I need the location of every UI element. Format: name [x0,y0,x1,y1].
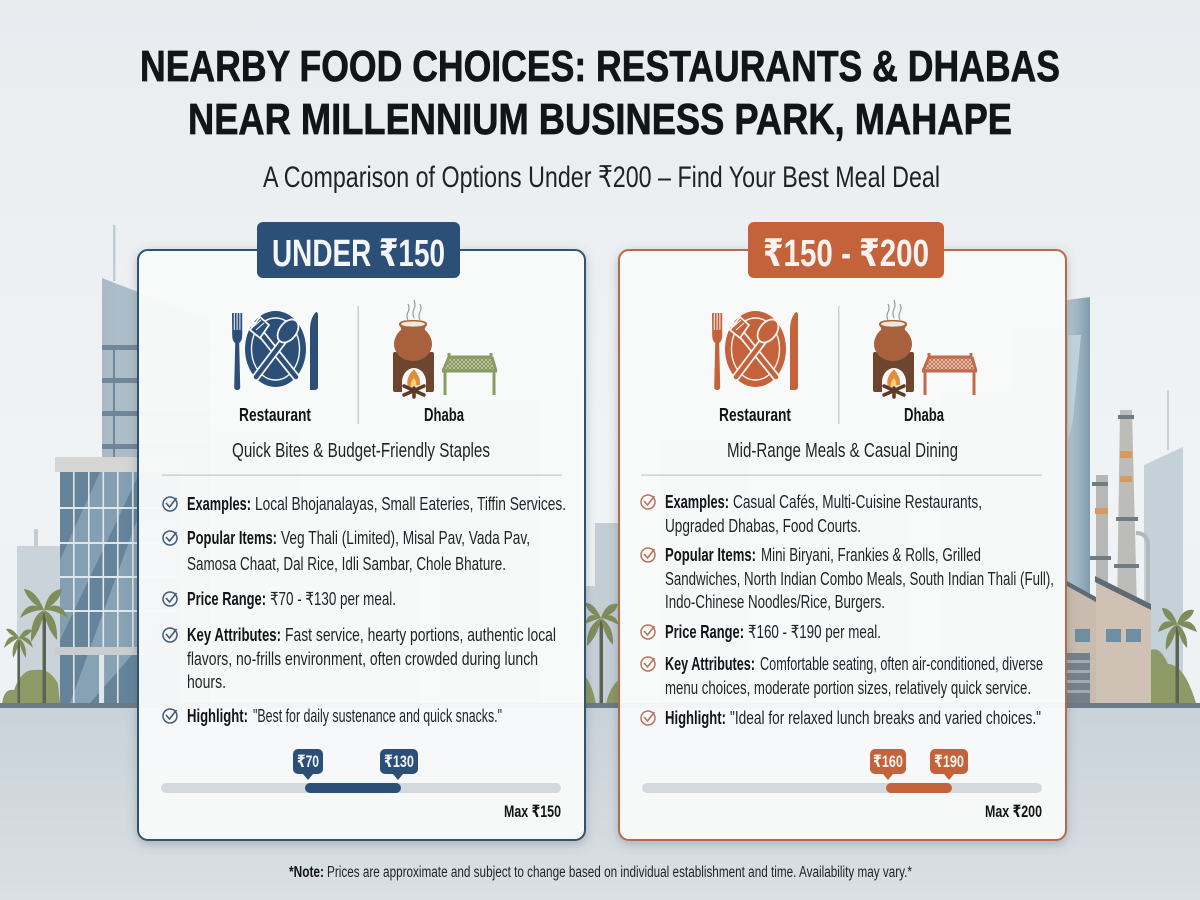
item: examples [163,494,566,514]
divider [358,306,359,424]
item: popular items [641,545,1054,612]
badge: 150 to 200: ₹150 - ₹200 [763,233,929,275]
max label: Max ₹150 [504,802,561,821]
price range bar [642,749,1042,821]
icon: restaurant plate and cutlery [712,311,798,390]
item: highlight: Highlight: [187,706,248,726]
panel: under 150 [138,222,585,840]
badge: under 150: UNDER ₹150 [272,233,445,275]
tagline: Mid-Range Meals & Casual Dining [727,440,958,462]
label: dhaba: Dhaba [424,405,465,425]
tagline: Quick Bites & Budget-Friendly Staples [232,440,490,462]
item: key attributes [163,625,556,692]
tooltip: 130: ₹130 [384,752,414,771]
item: highlight: "Ideal for relaxed lunch breaks and varied choices." [730,708,1041,728]
background: left city buildings [2,225,210,704]
ground line [0,703,1200,708]
item: key attributes: hours. [187,672,226,692]
item: popular items [163,528,530,574]
item: price range: ₹70 - ₹130 per meal. [270,589,396,609]
item: popular items: Indo-Chinese Noodles/Rice, Burgers. [665,592,885,612]
badge: under 150 [257,222,460,278]
item: key attributes [641,654,1043,698]
divider [838,306,839,424]
icon: dhaba clay pot on stove with cot [393,300,497,397]
tooltip: 130 [380,749,418,780]
tooltip: 70: ₹70 [297,752,319,771]
item: price range [641,622,881,642]
item: examples: Examples: [665,492,729,512]
footnote: Prices are approximate and subject to change based on individual establishment and time. Availability may vary.* [327,864,912,881]
item: examples: Local Bhojanalayas, Small Eateries, Tiffin Services. [255,494,566,514]
item: popular items: Mini Biryani, Frankies & Rolls, Grilled [761,545,981,565]
item: examples: Upgraded Dhabas, Food Courts. [665,516,861,536]
icon: dhaba clay pot on stove with cot [873,300,977,397]
item: highlight: "Best for daily sustenance and quick snacks." [253,706,502,726]
item: key attributes: Key Attributes: [665,654,755,674]
item: key attributes: Comfortable seating, often air-conditioned, diverse [760,654,1043,674]
tooltip: 70 [293,749,323,780]
item: examples: Examples: [187,494,251,514]
item: key attributes: Key Attributes: [187,625,281,645]
item: price range: Price Range: [665,622,744,642]
title: NEAR MILLENNIUM BUSINESS PARK, MAHAPE [188,95,1012,144]
card background [138,250,585,840]
title [140,42,1060,144]
label: dhaba: Dhaba [904,405,945,425]
item: key attributes: Fast service, hearty portions, authentic local [285,625,556,645]
item: highlight [163,706,502,726]
item: price range: Price Range: [187,589,266,609]
card background [619,250,1066,840]
background: right factory skyline [1067,297,1197,704]
price range bar [161,749,561,821]
item: examples [641,492,982,536]
item: price range: ₹160 - ₹190 per meal. [748,622,881,642]
item: popular items: Popular Items: [665,545,756,565]
footnote: *Note: [289,864,324,881]
item: price range [163,589,396,609]
subtitle: A Comparison of Options Under ₹200 – Find Your Best Meal Deal [263,161,940,194]
badge: 150 to 200 [748,222,944,278]
label: restaurant: Restaurant [719,405,791,425]
max label: Max ₹200 [985,802,1042,821]
icon: restaurant plate and cutlery [232,311,318,390]
tooltip: 190: ₹190 [934,752,964,771]
label: restaurant: Restaurant [239,405,311,425]
item: popular items: Samosa Chaat, Dal Rice, Idli Sambar, Chole Bhature. [187,554,506,574]
item: popular items: Popular Items: [187,528,277,548]
item: highlight: Highlight: [665,708,726,728]
tooltip: 160 [870,749,906,780]
item: key attributes: flavors, no-frills environment, often crowded during lunch [187,649,538,669]
item: popular items: Sandwiches, North Indian Combo Meals, South Indian Thali (Full), [665,569,1054,589]
background: centre buildings and palm [215,330,1067,704]
item: examples: Casual Cafés, Multi-Cuisine Restaurants, [733,492,982,512]
item: highlight [641,708,1041,728]
tooltip: 190 [930,749,968,780]
item: popular items: Veg Thali (Limited), Misal Pav, Vada Pav, [281,528,530,548]
panel: 150 to 200 [619,222,1066,840]
tooltip: 160: ₹160 [873,752,903,771]
item: key attributes: menu choices, moderate portion sizes, relatively quick service. [665,678,1031,698]
